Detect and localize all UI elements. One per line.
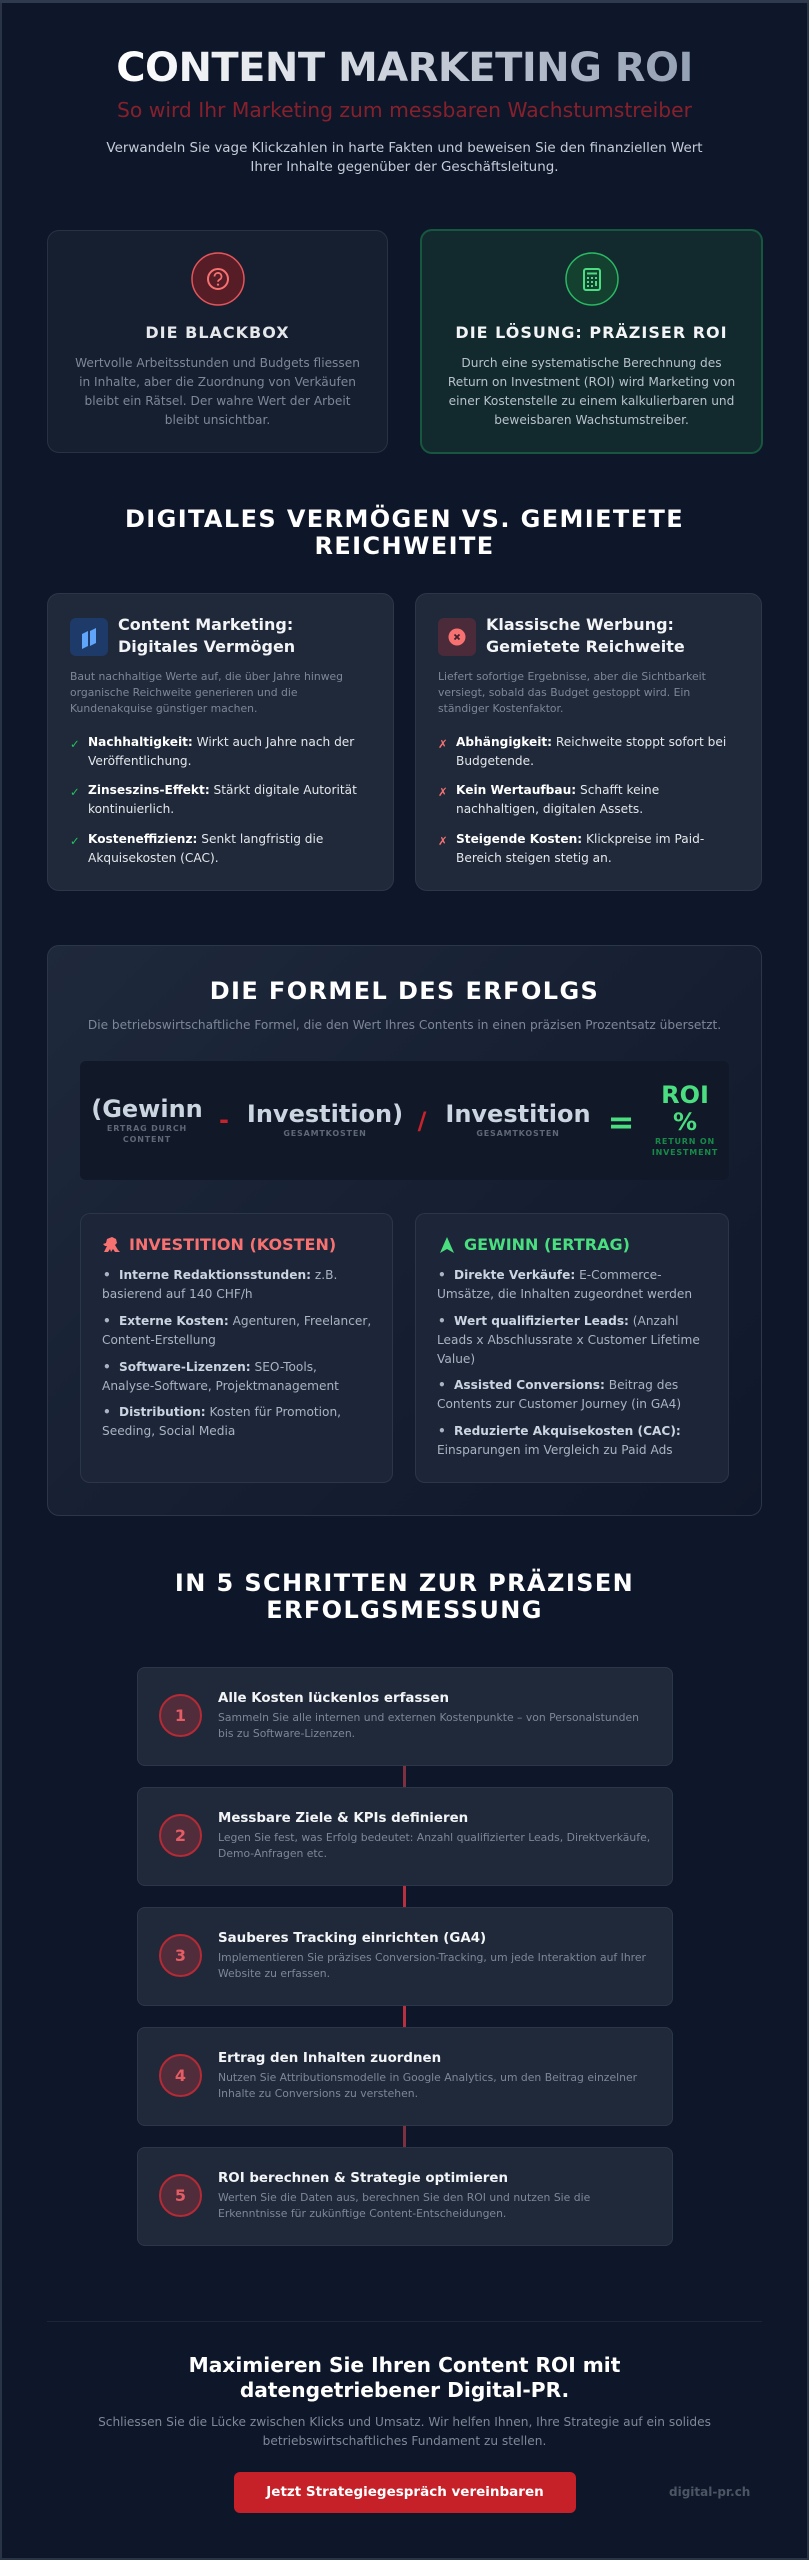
text: blackbox: in Inhalte, aber die Zuordnung von Verkäufen [79,375,356,389]
text: content marketing: organische Reichweite generieren und die [70,686,298,699]
text: lösung [448,356,735,427]
connector line [403,2006,406,2028]
heading: formel: DIE FORMEL DES ERFOLGS [210,977,599,1005]
panel: gewinn ertrag: Value) [437,1352,475,1366]
heading: investition: INVESTITION (KOSTEN) [129,1235,336,1254]
operator: divide: / [418,1107,426,1135]
text: lösung: einer Kostenstelle zu einem kalkulierbaren und [449,394,734,408]
heading: digitales vermögen [125,504,684,560]
footer heading [189,2353,620,2402]
heading: content marketing [118,615,295,656]
panel: gewinn ertrag: Assisted Conversions: Beitrag des [454,1378,678,1392]
panel: investition kosten: Content-Erstellung [102,1333,216,1347]
text: blackbox: Wertvolle Arbeitsstunden und Budgets fliessen [75,356,360,370]
panel: investition kosten: Distribution: Kosten für Promotion, [119,1405,341,1419]
footer heading: Maximieren Sie Ihren Content ROI mit [189,2353,620,2377]
benefit list: Nachhaltigkeit: Wirkt auch Jahre nach der [88,735,354,749]
icon: helmet [103,1237,120,1252]
benefit list: Zinseszins-Effekt: Stärkt digitale Autorität [88,783,357,797]
benefit list [70,735,357,865]
heading: klassische werbung [486,615,685,656]
term: roi: % [673,1108,697,1136]
step 3 [137,1907,673,2006]
panel: formel des erfolgs [47,945,762,1516]
panel: die blackbox [47,230,388,453]
text: blackbox: bleibt unsichtbar. [165,413,270,427]
drawback list: ✗ [438,737,448,751]
term: gewinn: CONTENT [123,1135,171,1144]
panel: investition kosten: Software-Lizenzen: SEO-Tools, [119,1360,317,1374]
benefit list: ✓ [70,834,80,848]
step 4: Ertrag den Inhalten zuordnen [218,2051,441,2066]
step 2: 2 [175,1826,186,1845]
drawback list: ✗ [438,785,448,799]
brand: digital-pr.ch [669,2485,750,2499]
heading: digitales vermögen: DIGITALES VERMÖGEN VS. GEMIETETE [125,505,684,533]
panel: gewinn ertrag: Reduzierte Akquisekosten (CAC): [454,1424,681,1438]
benefit list: Veröffentlichung. [88,754,191,768]
text: klassische werbung: ständiger Kostenfaktor. [438,702,563,715]
text: klassische werbung: versiegt, sobald das Budget gestoppt wird. Ein [438,686,690,699]
text: klassische werbung [438,670,706,715]
step 5: Erkenntnisse für zukünftige Content-Entscheidungen. [218,2207,506,2220]
benefit list: ✓ [70,785,80,799]
heading: klassische werbung: Klassische Werbung: [486,615,674,634]
step 2: Messbare Ziele & KPIs definieren [218,1811,468,1826]
step 1 [137,1667,673,1766]
heading: digitales vermögen: REICHWEITE [314,532,495,560]
footer heading: datengetriebener Digital-PR. [240,2378,569,2402]
footer text: Schliessen Sie die Lücke zwischen Klicks und Umsatz. Wir helfen Ihnen, Ihre Strategie auf ein solides [98,2415,711,2429]
cost list: Interne Redaktionsstunden: z.B. [119,1268,337,1282]
text: blackbox [75,356,360,427]
panel: investition kosten: Externe Kosten: Agenturen, Freelancer, [119,1314,371,1328]
heading: die lösung: DIE LÖSUNG: PRÄZISER ROI [455,323,728,342]
step 5 [137,2147,673,2246]
drawback list: Bereich steigen stetig an. [456,851,612,865]
heading: gewinn: GEWINN (ERTRAG) [464,1235,630,1254]
drawback list: Steigende Kosten: Klickpreise im Paid- [456,832,704,846]
step 3: Sauberes Tracking einrichten (GA4) [218,1931,486,1946]
title: CONTENT MARKETING ROI [116,45,693,91]
step 4: Inhalte zu Conversions zu verstehen. [218,2087,418,2100]
drawback list: Abhängigkeit: Reichweite stoppt sofort bei [456,735,726,749]
panel: content marketing [47,593,394,891]
term: investition: Investition) [247,1100,403,1128]
panel: gewinn ertrag: • [438,1314,446,1328]
term: roi: RETURN ON [655,1137,715,1146]
panel: gewinn ertrag: • [438,1424,446,1438]
cost list [102,1268,337,1301]
cost list: • [103,1268,111,1282]
panel: investition kosten: • [103,1314,111,1328]
step 5: Werten Sie die Daten aus, berechnen Sie den ROI und nutzen Sie die [218,2191,590,2204]
step 4: 4 [175,2066,186,2085]
drawback list [438,735,726,865]
drawback list: Budgetende. [456,754,534,768]
step 3: Website zu erfassen. [218,1967,330,1980]
text: blackbox: bleibt ein Rätsel. Der wahre Wert der Arbeit [84,394,351,408]
heading: die blackbox: DIE BLACKBOX [145,323,290,342]
operator: minus: - [219,1106,229,1134]
panel: gewinn ertrag [415,1213,729,1483]
footer text [98,2415,711,2448]
benefit list: Kosteneffizienz: Senkt langfristig die [88,832,323,846]
text: lösung: beweisbaren Wachstumstreiber. [494,413,689,427]
step 2 [137,1787,673,1886]
panel: investition kosten: • [103,1405,111,1419]
text: formel: Die betriebswirtschaftliche Formel, die den Wert Ihres Contents in einen präzisen Prozentsatz übersetzt. [88,1018,721,1032]
subtitle: So wird Ihr Marketing zum messbaren Wachstumstreiber [117,98,692,122]
profit list: • [438,1268,446,1282]
text: lösung: Return on Investment (ROI) wird Marketing von [448,375,735,389]
benefit list: Akquisekosten (CAC). [88,851,219,865]
text: content marketing: Baut nachhaltige Werte auf, die über Jahre hinweg [70,670,343,683]
panel: gewinn ertrag: Contents zur Customer Journey (in GA4) [437,1397,681,1411]
heading: 5 schritte [175,1568,634,1624]
panel: investition kosten: • [103,1360,111,1374]
term: gewinn [91,1095,203,1144]
heading: 5 schritte: ERFOLGSMESSUNG [266,1596,543,1624]
profit list: Direkte Verkäufe: E-Commerce- [454,1268,662,1282]
step 4 [137,2027,673,2126]
cost list: basierend auf 140 CHF/h [102,1287,253,1301]
intro text [106,141,703,175]
drawback list: Kein Wertaufbau: Schafft keine [456,783,659,797]
benefit list: kontinuierlich. [88,802,174,816]
panel: investition kosten [80,1213,393,1483]
term: roi [652,1081,718,1157]
connector line [403,2126,406,2148]
step 3: Implementieren Sie präzises Conversion-Tracking, um jede Interaktion auf Ihrer [218,1951,646,1964]
term: investition: Investition [445,1100,591,1128]
step 2: Legen Sie fest, was Erfolg bedeutet: Anzahl qualifizierter Leads, Direktverkäufe, [218,1831,650,1844]
term: investition: GESAMTKOSTEN [283,1129,367,1138]
heading: klassische werbung: Gemietete Reichweite [486,636,685,656]
panel: die lösung [420,229,763,454]
formula [80,1061,729,1180]
icon: cancel [438,618,476,656]
text: klassische werbung: Liefert sofortige Ergebnisse, aber die Sichtbarkeit [438,670,706,683]
icon: map [70,618,108,656]
panel: gewinn ertrag: Einsparungen im Vergleich zu Paid Ads [437,1443,673,1457]
call to action button [234,2472,576,2513]
connector line [403,1886,406,1908]
text: lösung: Durch eine systematische Berechnung des [461,356,722,370]
footer text: betriebswirtschaftliches Fundament zu stellen. [263,2434,546,2448]
heading: content marketing: Content Marketing: [118,615,293,634]
call to action button: Jetzt Strategiegespräch vereinbaren [266,2484,544,2500]
step 1: Sammeln Sie alle internen und externen Kostenpunkte – von Personalstunden [218,1711,639,1724]
term: gewinn: ERTRAG DURCH [107,1124,187,1133]
intro text: Ihrer Inhalte gegenüber der Geschäftsleitung. [250,160,559,175]
text: content marketing: Kundenakquise günstiger machen. [70,702,257,715]
step 4: Nutzen Sie Attributionsmodelle in Google Analytics, um den Beitrag einzelner [218,2071,637,2084]
connector line [403,1766,406,1788]
term: investition: GESAMTKOSTEN [476,1129,560,1138]
step 5: 5 [175,2186,186,2205]
icon: up arrow [440,1237,454,1253]
term: gewinn: (Gewinn [91,1095,203,1123]
panel: investition kosten: Analyse-Software, Projektmanagement [102,1379,339,1393]
term: roi: INVESTMENT [652,1148,718,1157]
panel: klassische werbung [415,593,762,891]
step 1: Alle Kosten lückenlos erfassen [218,1691,449,1706]
intro text: Verwandeln Sie vage Klickzahlen in harte Fakten und beweisen Sie den finanziellen Wert [106,141,703,156]
term: roi: ROI [661,1081,709,1109]
panel: gewinn ertrag: Wert qualifizierter Leads: (Anzahl [454,1314,678,1328]
text: content marketing [70,670,343,715]
icon: question mark [191,252,245,306]
profit list: Umsätze, die Inhalten zugeordnet werden [437,1287,692,1301]
panel: investition kosten: Seeding, Social Media [102,1424,235,1438]
step 5: ROI berechnen & Strategie optimieren [218,2171,508,2186]
icon: calculator [565,252,619,306]
step 2: Demo-Anfragen etc. [218,1847,327,1860]
heading: 5 schritte: IN 5 SCHRITTEN ZUR PRÄZISEN [175,1569,634,1597]
heading: content marketing: Digitales Vermögen [118,636,295,656]
drawback list: nachhaltigen, digitalen Assets. [456,802,643,816]
operator: equals: = [608,1103,634,1141]
panel: gewinn ertrag: • [438,1378,446,1392]
step 1: bis zu Software-Lizenzen. [218,1727,355,1740]
profit list [437,1268,692,1301]
benefit list: ✓ [70,737,80,751]
step 3: 3 [175,1946,186,1965]
panel: gewinn ertrag: Leads x Abschlussrate x Customer Lifetime [437,1333,700,1347]
drawback list: ✗ [438,834,448,848]
step 1: 1 [175,1706,186,1725]
